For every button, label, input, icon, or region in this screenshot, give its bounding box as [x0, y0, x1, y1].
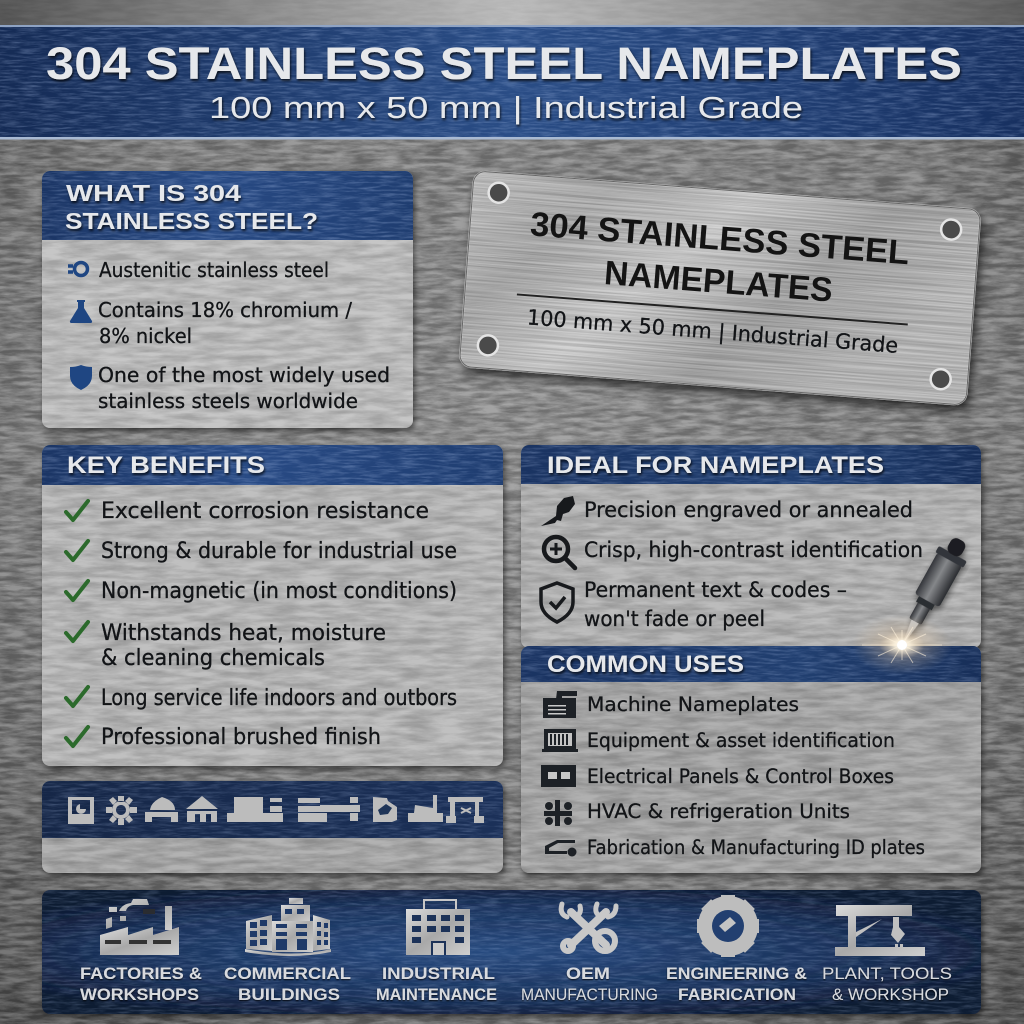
heading: COMMON USES — [547, 651, 744, 678]
list text: Excellent corrosion resistance — [101, 499, 429, 524]
mounting holes — [476, 182, 963, 391]
item: engineering and fabrication — [666, 895, 807, 1004]
list text: Machine Nameplates — [587, 693, 799, 716]
icons: small silhouettes — [68, 795, 484, 825]
item: plant, tools and workshop: PLANT, TOOLS — [822, 965, 952, 983]
list text: 8% nickel — [99, 324, 192, 348]
item: commercial buildings: COMMERCIAL — [224, 965, 351, 983]
item: industrial maintenance — [376, 899, 497, 1004]
heading: IDEAL FOR NAMEPLATES — [547, 452, 884, 479]
list text: stainless steels worldwide — [98, 389, 358, 413]
list text: Electrical Panels & Control Boxes — [587, 765, 894, 788]
list text: Equipment & asset identification — [587, 729, 895, 752]
plate text: NAMEPLATES — [603, 254, 834, 310]
list text: Permanent text & codes – — [584, 578, 847, 602]
panel: icon strip — [42, 781, 503, 873]
item: factories and workshops: WORKSHOPS — [80, 986, 199, 1004]
icons: check marks — [66, 501, 88, 746]
item: commercial buildings — [224, 898, 351, 1004]
heading: KEY BENEFITS — [67, 452, 265, 479]
list text: won't fade or peel — [584, 607, 765, 631]
list text: Withstands heat, moisture — [101, 621, 386, 646]
icon: flask — [70, 300, 92, 323]
panel: ideal for nameplates — [521, 445, 981, 648]
list text: Precision engraved or annealed — [584, 498, 913, 522]
icon: shield check — [541, 583, 573, 622]
plate text: 304 STAINLESS STEEL — [529, 205, 911, 272]
panel: what is 304 stainless steel — [42, 171, 413, 428]
heading: WHAT IS 304 — [66, 180, 241, 206]
list text: Fabrication & Manufacturing ID plates — [587, 836, 925, 859]
spark — [852, 615, 952, 675]
list text: Contains 18% chromium / — [98, 298, 352, 322]
list text: Non-magnetic (in most conditions) — [101, 579, 457, 604]
title: 304 STAINLESS STEEL NAMEPLATES — [46, 38, 962, 89]
list text: Strong & durable for industrial use — [101, 539, 457, 564]
item: plant, tools and workshop: & WORKSHOP — [832, 986, 949, 1004]
item: factories and workshops — [80, 899, 202, 1004]
item: industrial maintenance: MAINTENANCE — [376, 986, 497, 1004]
item: engineering and fabrication: FABRICATION — [678, 986, 796, 1004]
heading: STAINLESS STEEL? — [65, 208, 318, 234]
icons: uses — [541, 691, 578, 856]
list text: HVAC & refrigeration Units — [587, 800, 850, 823]
list text: Long service life indoors and outbors — [101, 686, 457, 711]
item: commercial buildings: BUILDINGS — [238, 986, 340, 1004]
item: plant, tools and workshop — [822, 905, 952, 1004]
panel: industries band — [42, 890, 981, 1014]
item: engineering and fabrication: ENGINEERING & — [666, 965, 807, 983]
list text: Austenitic stainless steel — [99, 258, 329, 282]
item: industrial maintenance: INDUSTRIAL — [382, 965, 495, 983]
icon: magnifier — [544, 537, 575, 568]
list text: Professional brushed finish — [101, 725, 381, 750]
item: factories and workshops: FACTORIES & — [80, 965, 202, 983]
panel: common uses — [521, 646, 981, 873]
list text: One of the most widely used — [98, 363, 390, 387]
title banner — [0, 25, 1024, 140]
nameplate — [459, 171, 981, 405]
icon: laser engraving pen with spark — [852, 532, 974, 675]
icon: shield — [70, 365, 92, 390]
icon: austenitic — [68, 262, 88, 276]
list text: Crisp, high-contrast identification — [584, 538, 923, 562]
item: oem manufacturing — [521, 904, 658, 1004]
subtitle: 100 mm x 50 mm | Industrial Grade — [209, 90, 803, 125]
panel: key benefits — [42, 445, 503, 766]
icon: engraver — [541, 496, 575, 526]
list text: & cleaning chemicals — [101, 646, 325, 671]
nameplate: 100 mm x 50 mm | Industrial Grade — [526, 305, 899, 359]
item: oem manufacturing: MANUFACTURING — [521, 986, 658, 1004]
item: oem manufacturing: OEM — [566, 965, 610, 983]
